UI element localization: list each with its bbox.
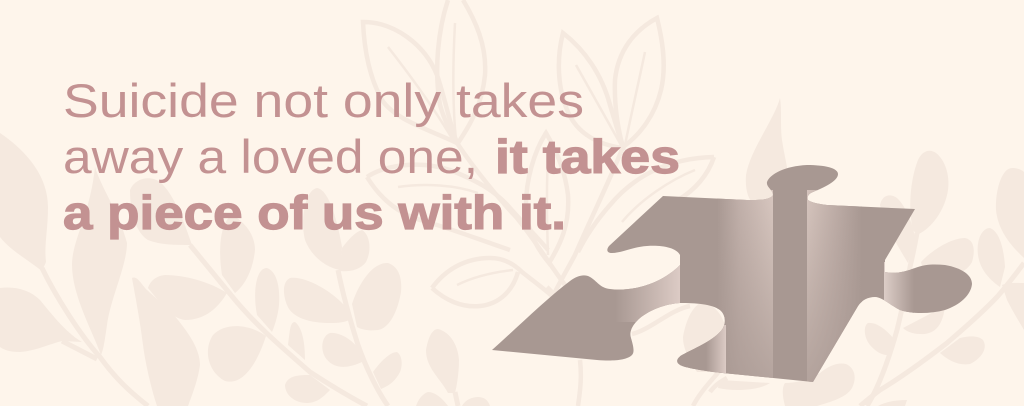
line 3 bold: a piece of us with it. bbox=[63, 186, 566, 239]
left notch wall bbox=[615, 262, 680, 322]
right plant stems bbox=[860, 233, 1024, 406]
line 1: Suicide not only takes bbox=[63, 74, 584, 127]
left filled foliage bbox=[0, 133, 490, 406]
right filled foliage bbox=[683, 98, 1024, 406]
line 2 regular: away a loved one, bbox=[63, 130, 478, 183]
line 2 bold: it takes bbox=[495, 130, 680, 183]
centre right wall bbox=[807, 190, 862, 385]
center outlined foliage bbox=[363, 0, 727, 406]
left plant stems bbox=[42, 245, 458, 406]
puzzle piece hole bbox=[492, 165, 972, 382]
inner wall shading bbox=[728, 245, 842, 382]
centre left wall bbox=[717, 190, 773, 385]
lower tab wall bbox=[680, 325, 726, 374]
headline text bbox=[63, 74, 680, 239]
leaf midribs bbox=[388, 23, 695, 285]
right tab wall bbox=[884, 262, 914, 318]
